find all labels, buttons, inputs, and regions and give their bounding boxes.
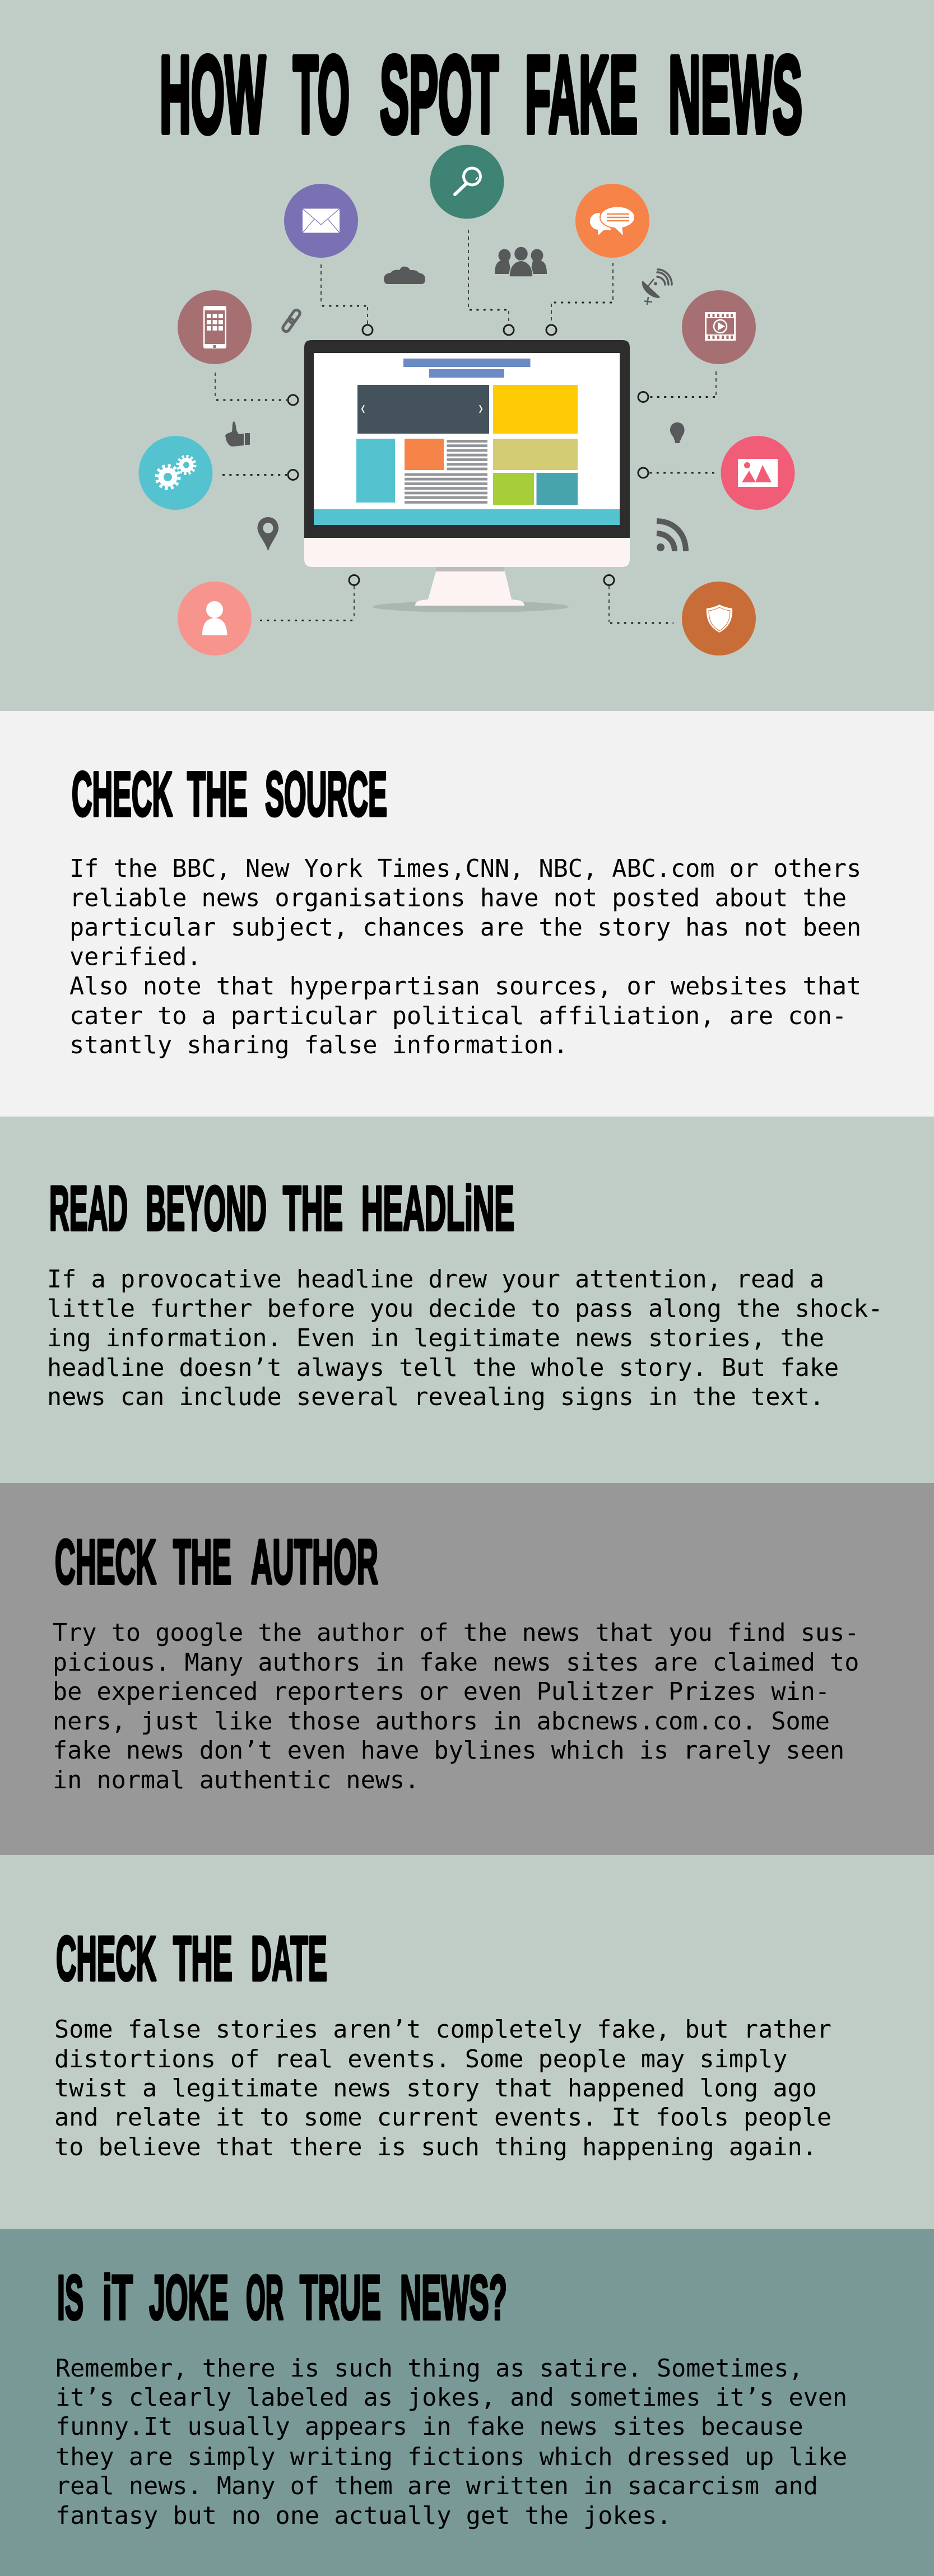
text: read beyond the headline: little further before you decide to pass along the shock- (47, 1295, 883, 1323)
icon: person circle (178, 582, 252, 655)
text: check the author: Try to google the author of the news that you find sus- (53, 1619, 859, 1647)
panel: check the date: DATE (251, 1924, 327, 1993)
text: check the date: to believe that there is such thing happening again. (54, 2133, 817, 2161)
text: check the source (69, 855, 861, 1059)
text: check the date: and relate it to some current events. It fools people (54, 2104, 831, 2132)
heading: check the author: CHECK (55, 1527, 156, 1597)
text: check the date: Some false stories aren’t completely fake, but rather (54, 2016, 831, 2044)
heading: check the source: THE (187, 759, 248, 829)
text: check the source: stantly sharing false information. (69, 1031, 568, 1059)
panel: is it joke or true news: NEWS? (400, 2262, 507, 2333)
text: is it joke or true news: Remember, there is such thing as satire. Sometimes, (55, 2355, 803, 2383)
panel: check the source: SOURCE (265, 759, 387, 829)
monitor (304, 340, 630, 612)
panel: check the author: AUTHOR (251, 1527, 378, 1597)
text: is it joke or true news (55, 2355, 847, 2530)
icon: thumbs up (225, 421, 250, 447)
panel: check the author (0, 1483, 934, 1855)
icon: people (495, 247, 547, 277)
title: FAKE (525, 34, 638, 156)
icon: mail circle (284, 184, 358, 258)
text: is it joke or true news: fantasy but no one actually get the jokes. (55, 2502, 671, 2530)
title (160, 34, 802, 156)
heading: is it joke or true news (57, 2262, 507, 2333)
heading: read beyond the headline: READ (49, 1173, 128, 1244)
heading: check the source: CHECK (72, 759, 173, 829)
icon: cloud (384, 267, 425, 284)
connector: video (638, 371, 716, 402)
text: check the author: ners, just like those authors in abcnews.com.co. Some (53, 1708, 830, 1736)
icon: search circle (430, 145, 504, 218)
text: read beyond the headline: If a provocative headline drew your attention, read a (47, 1266, 824, 1294)
connector: search (468, 230, 514, 335)
text: is it joke or true news: they are simply writing fictions which dressed up like (55, 2443, 847, 2471)
icon: image circle (721, 436, 794, 510)
text: is it joke or true news: real news. Many of them are written in sacarcism and (55, 2472, 818, 2500)
connector: image (638, 468, 714, 478)
title: HOW (160, 34, 266, 156)
text: read beyond the headline: ing information. Even in legitimate news stories, the (47, 1324, 824, 1352)
text: check the author: be experienced reporters or even Pulitzer Prizes win- (53, 1678, 830, 1706)
connector: gears (222, 469, 298, 480)
heading: read beyond the headline (49, 1173, 514, 1244)
text: read beyond the headline (47, 1266, 883, 1411)
panel: check the source (0, 711, 934, 1117)
icon: chain link (281, 309, 301, 333)
heading: is it joke or true news: TRUE (300, 2262, 381, 2333)
text: is it joke or true news: funny.It usually appears in fake news sites because (55, 2413, 803, 2441)
text: read beyond the headline: news can include several revealing signs in the text. (47, 1383, 824, 1411)
heading: is it joke or true news: IS (57, 2262, 83, 2333)
text: check the date: twist a legitimate news story that happened long ago (54, 2075, 817, 2103)
text: is it joke or true news: it’s clearly labeled as jokes, and sometimes it’s even (55, 2384, 847, 2412)
text: check the source: reliable news organisations have not posted about the (69, 884, 847, 912)
heading: is it joke or true news: iT (103, 2262, 133, 2333)
text: check the source: particular subject, chances are the story has not been (69, 914, 861, 942)
connector: shield (604, 575, 673, 623)
icon: light bulb (670, 422, 685, 443)
icon: chat circle (575, 184, 649, 258)
heading: check the author (55, 1527, 378, 1597)
panel: read beyond the headline: HEADLiNE (361, 1173, 514, 1244)
connector: phone (215, 373, 298, 405)
text: check the author (53, 1619, 859, 1794)
heading: check the date: THE (173, 1924, 233, 1993)
heading: read beyond the headline: THE (283, 1173, 343, 1244)
panel: hero (0, 0, 934, 711)
text: check the source: If the BBC, New York Times,CNN, NBC, ABC.com or others (69, 855, 861, 883)
icon: location pin (258, 517, 278, 551)
connector: mail (321, 264, 373, 335)
text: check the author: in normal authentic news. (53, 1766, 419, 1794)
text: read beyond the headline: headline doesn’t always tell the whole story. But fake (47, 1354, 839, 1382)
panel: read beyond the headline (0, 1117, 934, 1483)
text: check the date: distortions of real events. Some people may simply (54, 2045, 788, 2073)
title: SPOT (380, 34, 499, 156)
icon: video circle (682, 290, 756, 364)
heading: check the author: THE (173, 1527, 231, 1597)
title: TO (293, 34, 350, 156)
icon: rss (657, 521, 686, 551)
panel: check the date (0, 1855, 934, 2229)
text: check the source: Also note that hyperpartisan sources, or websites that (69, 973, 861, 1001)
icon: phone circle (178, 290, 252, 364)
icon: satellite dish (642, 269, 672, 305)
heading: read beyond the headline: BEYOND (146, 1173, 267, 1244)
connector: person (260, 575, 359, 621)
text: check the author: picious. Many authors in fake news sites are claimed to (53, 1649, 859, 1677)
connector: chat (546, 263, 613, 335)
heading: check the date: CHECK (56, 1924, 156, 1993)
text: check the source: cater to a particular political affiliation, are con- (69, 1002, 847, 1030)
panel: is it joke or true news (0, 2229, 934, 2576)
icon: gears circle (139, 436, 213, 510)
text: check the date (54, 2016, 831, 2161)
icon: shield circle (682, 582, 756, 655)
heading: is it joke or true news: JOKE (149, 2262, 229, 2333)
monitor shadow (373, 601, 569, 612)
text: check the source: verified. (69, 943, 202, 971)
heading: is it joke or true news: OR (246, 2262, 284, 2333)
text: check the author: fake news don’t even have bylines which is rarely seen (53, 1737, 844, 1765)
